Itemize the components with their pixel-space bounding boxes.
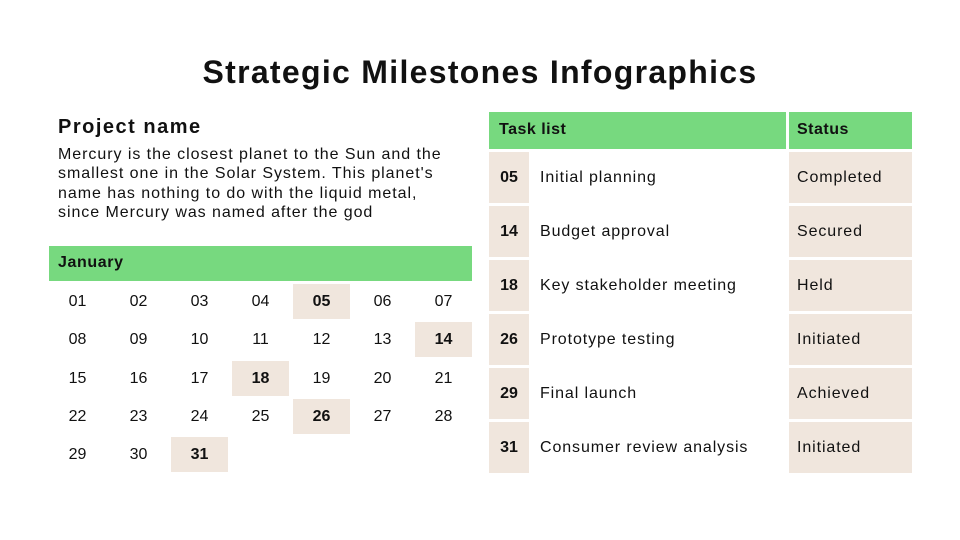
calendar days: 07 <box>435 292 452 310</box>
calendar days: 25 <box>252 408 269 424</box>
calendar days: 15 <box>69 370 86 386</box>
task row 29: 29 <box>500 384 518 402</box>
task row 14: Budget approval <box>540 222 670 240</box>
calendar days: 02 <box>130 292 147 310</box>
task row 31 <box>489 422 912 473</box>
calendar days: 27 <box>374 408 391 424</box>
table header <box>489 112 912 149</box>
calendar days: 10 <box>191 330 208 348</box>
calendar days: 21 <box>435 370 452 386</box>
calendar days: 08 <box>69 330 86 348</box>
text block: description <box>58 146 442 221</box>
task row 05: Initial planning <box>540 168 657 186</box>
calendar days: 03 <box>191 292 208 310</box>
task row 26: Prototype testing <box>540 330 675 348</box>
task row 29: Achieved <box>797 384 870 402</box>
calendar days: 09 <box>130 330 147 348</box>
title: Strategic Milestones Infographics <box>202 54 758 90</box>
panel: task table <box>489 112 912 149</box>
text block: description: since Mercury was named after the god <box>58 204 373 221</box>
calendar days: 28 <box>435 408 452 424</box>
calendar header: January <box>58 254 124 271</box>
task row 05: Completed <box>797 168 882 186</box>
calendar days: 01 <box>69 292 86 310</box>
task row 31: 31 <box>500 438 518 456</box>
text block: description: smallest one in the Solar System. This planet's <box>58 165 434 182</box>
heading: project name: Project name <box>58 116 202 138</box>
calendar days: 29 <box>69 446 86 462</box>
task row 14 <box>489 206 912 257</box>
calendar days: 20 <box>374 370 391 386</box>
calendar days: 30 <box>130 446 147 462</box>
calendar days: 22 <box>69 408 86 424</box>
calendar days: 14 <box>435 330 452 348</box>
task row 18: Key stakeholder meeting <box>540 276 737 294</box>
task row 31: Initiated <box>797 438 861 456</box>
calendar days: 17 <box>191 370 208 386</box>
calendar days <box>69 284 472 472</box>
task row 14: Secured <box>797 222 863 240</box>
calendar days: 05 <box>313 292 330 310</box>
calendar days: 26 <box>313 408 330 424</box>
task row 26 <box>489 314 912 365</box>
task row 05: 05 <box>500 168 518 186</box>
task row 18: 18 <box>500 276 518 294</box>
task row 05 <box>489 152 912 203</box>
task row 26: Initiated <box>797 330 861 348</box>
calendar days: 19 <box>313 370 330 386</box>
text block: description: Mercury is the closest planet to the Sun and the <box>58 146 442 163</box>
task row 31: Consumer review analysis <box>540 438 748 456</box>
panel: calendar <box>49 246 472 472</box>
calendar days: 12 <box>313 330 330 348</box>
calendar days: 11 <box>252 330 269 348</box>
calendar header <box>49 246 472 281</box>
task row 18 <box>489 260 912 311</box>
task row 29: Final launch <box>540 384 637 402</box>
task row 18: Held <box>797 276 834 294</box>
text block: description: name has nothing to do with the liquid metal, <box>58 185 417 202</box>
calendar days: 16 <box>130 370 147 386</box>
calendar days: 31 <box>191 446 208 462</box>
task row 14: 14 <box>500 222 518 240</box>
calendar days: 23 <box>130 408 147 424</box>
calendar days: 04 <box>252 292 269 310</box>
table header: Task list <box>499 121 566 138</box>
task row 26: 26 <box>500 330 518 348</box>
calendar days: 13 <box>374 330 391 348</box>
table header: Status <box>797 121 849 138</box>
calendar days: 06 <box>374 292 391 310</box>
calendar days: 24 <box>191 408 208 424</box>
calendar days: 18 <box>252 370 269 386</box>
task row 29 <box>489 368 912 419</box>
